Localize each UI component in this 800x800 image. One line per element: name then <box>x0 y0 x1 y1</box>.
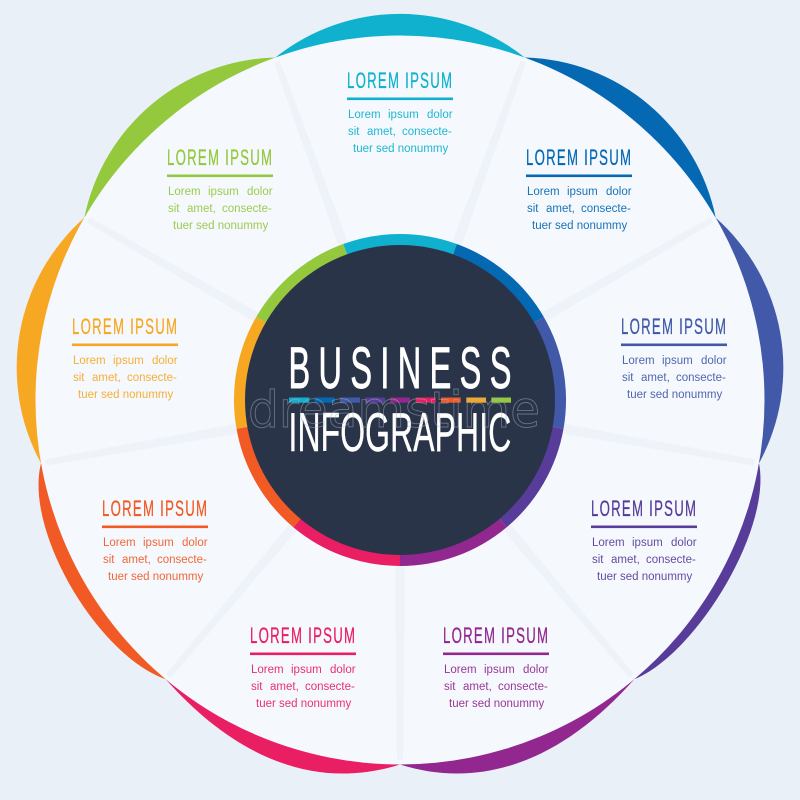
centre colour ring <box>234 234 566 566</box>
body copy: amet, <box>122 554 151 566</box>
heading: LOREM IPSUM <box>167 146 272 170</box>
body copy: sit <box>251 681 263 693</box>
heading: LOREM IPSUM <box>347 69 452 93</box>
body copy: consecte- <box>127 372 177 384</box>
title: business: BUSINESS <box>288 335 511 400</box>
body copy: amet, <box>187 203 216 215</box>
body copy: tuer sed nonummy <box>173 220 268 232</box>
body copy: amet, <box>270 681 299 693</box>
title colour bars <box>289 398 511 403</box>
body copy: consecte- <box>676 372 726 384</box>
body copy: Lorem <box>592 537 625 549</box>
underline <box>347 98 453 100</box>
petal: indigo <box>716 218 783 463</box>
underline <box>443 652 549 655</box>
body copy: ipsum <box>143 537 174 549</box>
body copy: dolor <box>427 109 453 121</box>
watermark: dreamstime <box>248 381 540 439</box>
petal: green <box>84 58 275 218</box>
heading: LOREM IPSUM <box>621 315 726 339</box>
body copy: consecte- <box>305 681 355 693</box>
body copy: consecte- <box>646 554 696 566</box>
underline <box>167 174 273 177</box>
body copy: Lorem <box>73 355 106 367</box>
heading: LOREM IPSUM <box>443 624 548 648</box>
underline <box>72 344 178 346</box>
heading: LOREM IPSUM <box>250 624 355 648</box>
body copy: tuer sed nonummy <box>627 389 722 401</box>
underline <box>621 344 727 346</box>
body copy: tuer sed nonummy <box>78 389 173 401</box>
petal: blue <box>525 58 716 218</box>
body copy: sit <box>168 203 180 215</box>
heading: LOREM IPSUM <box>72 315 177 339</box>
text block: cyan <box>347 69 453 155</box>
body copy: Lorem <box>527 186 560 198</box>
heading: LOREM IPSUM <box>102 497 207 521</box>
body copy: ipsum <box>567 186 598 198</box>
body copy: sit <box>622 372 634 384</box>
body copy: Lorem <box>622 355 655 367</box>
body copy: Lorem <box>251 664 284 676</box>
heading: LOREM IPSUM <box>591 497 696 521</box>
text block: purple <box>443 624 549 710</box>
body copy: ipsum <box>291 664 322 676</box>
underline <box>526 174 632 177</box>
body copy: amet, <box>92 372 121 384</box>
body copy: Lorem <box>348 109 381 121</box>
body copy: tuer sed nonummy <box>108 571 203 583</box>
text block: indigo <box>621 315 727 401</box>
body copy: consecte- <box>581 203 631 215</box>
body copy: tuer sed nonummy <box>256 698 351 710</box>
body copy: sit <box>444 681 456 693</box>
text block: pink <box>250 624 356 710</box>
body copy: ipsum <box>662 355 693 367</box>
petal: orange <box>39 463 166 679</box>
petal: purple <box>400 679 634 774</box>
body copy: dolor <box>330 664 356 676</box>
body copy: dolor <box>523 664 549 676</box>
body copy: amet, <box>611 554 640 566</box>
body copy: dolor <box>247 186 273 198</box>
petal: pink <box>166 679 400 774</box>
body copy: amet, <box>367 126 396 138</box>
centre dark circle <box>245 245 555 555</box>
body copy: Lorem <box>444 664 477 676</box>
body copy: sit <box>527 203 539 215</box>
body copy: Lorem <box>103 537 136 549</box>
body copy: tuer sed nonummy <box>449 698 544 710</box>
body copy: consecte- <box>157 554 207 566</box>
petal: amber <box>17 218 84 463</box>
body copy: dolor <box>606 186 632 198</box>
body copy: tuer sed nonummy <box>597 571 692 583</box>
body copy: amet, <box>463 681 492 693</box>
body copy: Lorem <box>168 186 201 198</box>
body copy: tuer sed nonummy <box>353 143 448 155</box>
body copy: consecte- <box>222 203 272 215</box>
text block: amber <box>72 315 178 401</box>
body copy: tuer sed nonummy <box>532 220 627 232</box>
body copy: ipsum <box>113 355 144 367</box>
body copy: ipsum <box>632 537 663 549</box>
body copy: dolor <box>701 355 727 367</box>
body copy: sit <box>73 372 85 384</box>
underline <box>591 526 697 528</box>
heading: LOREM IPSUM <box>526 146 631 170</box>
underline <box>250 652 356 655</box>
text block: violet <box>591 497 697 583</box>
title: infographic: INFOGRAPHIC <box>288 401 511 463</box>
petal: violet <box>634 463 760 679</box>
body copy: amet, <box>641 372 670 384</box>
body copy: dolor <box>182 537 208 549</box>
body copy: ipsum <box>208 186 239 198</box>
body copy: dolor <box>671 537 697 549</box>
underline <box>102 526 208 528</box>
text block: blue <box>526 146 632 232</box>
text block: orange <box>102 497 208 583</box>
body copy: sit <box>592 554 604 566</box>
body copy: sit <box>348 126 360 138</box>
body copy: amet, <box>546 203 575 215</box>
body copy: consecte- <box>402 126 452 138</box>
petal: cyan <box>275 14 525 57</box>
body copy: dolor <box>152 355 178 367</box>
body copy: ipsum <box>484 664 515 676</box>
body copy: ipsum <box>388 109 419 121</box>
body copy: consecte- <box>498 681 548 693</box>
body copy: sit <box>103 554 115 566</box>
text block: green <box>167 146 273 232</box>
